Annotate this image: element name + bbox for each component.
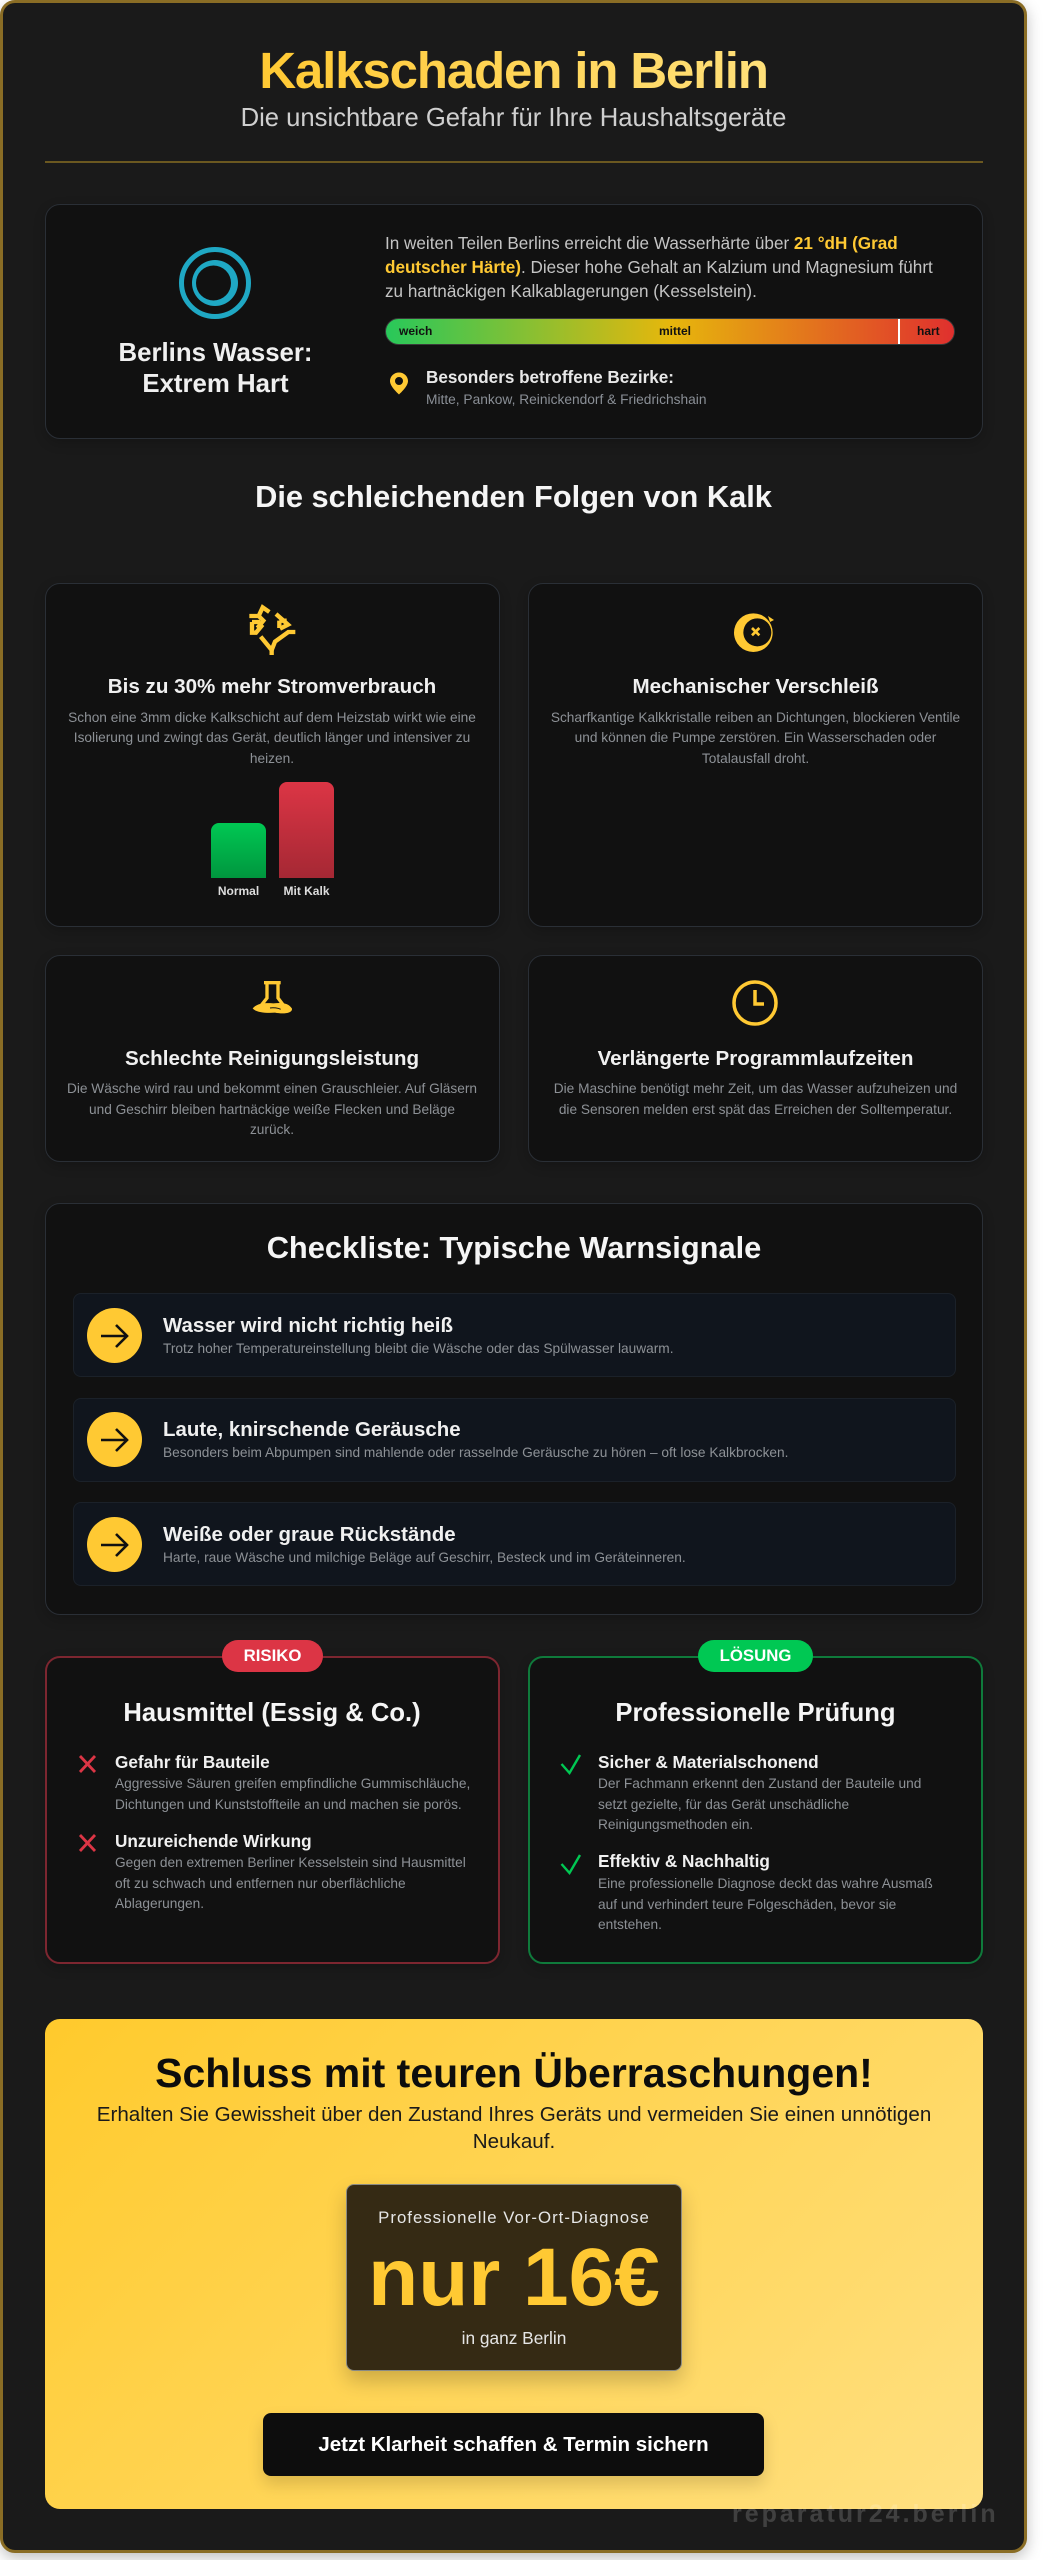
text: water hardness: zu hartnäckigen Kalkablagerungen (Kesselstein).: [385, 282, 757, 301]
label: mittel: mittel: [659, 324, 691, 338]
price: nur 16€: [368, 2232, 660, 2323]
heading: consequences: Die schleichenden Folgen von Kalk: [255, 479, 772, 514]
text: und Geschirr bleiben hartnäckige weiße Flecken und Beläge: [89, 1102, 455, 1117]
bar: mit Kalk: [279, 782, 334, 878]
text: [68, 710, 476, 766]
heading: Verlängerte Programmlaufzeiten: [598, 1047, 913, 1070]
text: Totalausfall droht.: [702, 751, 809, 766]
icon: x: [79, 1834, 96, 1852]
solution item 2 text: [598, 1876, 933, 1932]
panel: Stromverbrauch: [44, 583, 500, 927]
solution item 2 title: Effektiv & Nachhaltig: [598, 1851, 770, 1871]
subtitle: Die unsichtbare Gefahr für Ihre Haushaltsgeräte: [241, 104, 786, 132]
heading: Berlins Wasser: Berlins Wasser:: [118, 339, 313, 367]
text: [67, 1081, 477, 1137]
marker: [898, 319, 900, 344]
panel: risk: [44, 1656, 500, 1964]
solution item 2 text: auf und verhindert teure Folgeschäden, bevor sie: [598, 1897, 896, 1912]
text: water hardness: In weiten Teilen Berlins erreicht die Wasserhärte über 21 °dH (Grad: [385, 234, 898, 253]
price box: [346, 2184, 682, 2371]
price note: in ganz Berlin: [462, 2328, 566, 2348]
checklist item 1: [73, 1293, 956, 1377]
icon: flask with residue: [252, 981, 292, 1014]
text: Schon eine 3mm dicke Kalkschicht auf dem Heizstab wirkt wie eine: [68, 710, 476, 724]
badge: Loesung: [698, 1640, 813, 1672]
heading: Pruefung: Professionelle Prüfung: [615, 1699, 896, 1727]
badge: Risiko: RISIKO: [244, 1646, 301, 1665]
checklist item 3: [73, 1502, 956, 1586]
label: hart: hart: [917, 324, 940, 338]
icon: worn gear crescent: [734, 613, 774, 652]
risk item 2 text: Gegen den extremen Berliner Kesselstein sind Hausmittel: [115, 1855, 466, 1870]
text: affected districts: Besonders betroffene Bezirke:: [426, 368, 674, 387]
risk item 2 text: Ablagerungen.: [115, 1896, 204, 1911]
button: cta: [263, 2413, 764, 2476]
icon: arrow: [87, 1412, 142, 1467]
solution item 1 text: Der Fachmann erkennt den Zustand der Bauteile und: [598, 1776, 921, 1791]
text: [554, 1081, 957, 1117]
panel: Programmlaufzeiten: [528, 955, 983, 1162]
solution item 1 text: setzt gezielte, für das Gerät unschädliche: [598, 1797, 849, 1812]
icon: map pin: [390, 372, 408, 394]
heading: Berlins Wasser: Extrem Hart: [142, 370, 289, 398]
title: Kalkschaden in Berlin: [259, 42, 768, 99]
panel: checklist: [44, 1203, 983, 1615]
badge: Loesung: LÖSUNG: [720, 1646, 791, 1665]
solution item 1 text: [598, 1776, 921, 1832]
text: water hardness: deutscher Härte). Dieser hohe Gehalt an Kalzium und Magnesium führt: [385, 258, 933, 277]
label: normal: Normal: [218, 884, 259, 898]
item title: Wasser wird nicht richtig heiß: [163, 1314, 453, 1337]
item text: Besonders beim Abpumpen sind mahlende oder rasselnde Geräusche zu hören – oft lose Kalkbrocken.: [163, 1445, 788, 1460]
text: zurück.: [250, 1122, 294, 1137]
text: Die Maschine benötigt mehr Zeit, um das Wasser aufzuheizen und: [554, 1081, 957, 1096]
risk item 1 title: Gefahr für Bauteile: [115, 1752, 270, 1772]
heading: checklist: Checkliste: Typische Warnsignale: [267, 1230, 761, 1265]
risk item 1 text: Dichtungen und Kunststoffteile an und machen sie porös.: [115, 1797, 462, 1812]
button: cta: Jetzt Klarheit schaffen & Termin sichern: [318, 2433, 709, 2456]
text: cta: [97, 2103, 931, 2153]
chart: hardness scale bar: [385, 318, 955, 345]
solution item 2 text: Eine professionelle Diagnose deckt das wahre Ausmaß: [598, 1876, 933, 1891]
icon: arrow: [87, 1308, 142, 1363]
checklist item 2: [73, 1398, 956, 1482]
icon: check: [560, 1854, 581, 1875]
icon: plug with lightning: [249, 604, 296, 655]
item title: Weiße oder graue Rückstände: [163, 1523, 456, 1546]
bar: normal: [211, 823, 266, 878]
panel: Reinigungsleistung: [44, 955, 500, 1162]
solution item 1 text: Reinigungsmethoden ein.: [598, 1817, 753, 1832]
risk item 2 text: oft zu schwach und entfernen nur oberflächliche: [115, 1876, 406, 1891]
item text: Harte, raue Wäsche und milchige Beläge auf Geschirr, Besteck und im Geräteinneren.: [163, 1550, 686, 1565]
icon: water rings: [179, 247, 251, 319]
text: cta: Erhalten Sie Gewissheit über den Zustand Ihres Geräts und vermeiden Sie einen unnötigen: [97, 2103, 931, 2126]
item title: Laute, knirschende Geräusche: [163, 1418, 461, 1441]
solution item 2 text: entstehen.: [598, 1917, 662, 1932]
icon: x: [79, 1755, 96, 1773]
text: Scharfkantige Kalkkristalle reiben an Dichtungen, blockieren Ventile: [551, 710, 960, 724]
heading: Berlins Wasser: [118, 339, 313, 398]
heading: Schlechte Reinigungsleistung: [125, 1047, 419, 1070]
solution item 1 title: Sicher & Materialschonend: [598, 1752, 819, 1772]
item text: Trotz hoher Temperatureinstellung bleibt die Wäsche oder das Spülwasser lauwarm.: [163, 1341, 674, 1356]
heading: Bis zu 30% mehr Stromverbrauch: [108, 674, 436, 698]
badge: Risiko: [222, 1640, 323, 1672]
heading: Hausmittel: Hausmittel (Essig & Co.): [123, 1699, 421, 1727]
panel: call to action: [44, 2019, 983, 2509]
price label: Professionelle Vor-Ort-Diagnose: [378, 2208, 650, 2227]
text: die Sensoren melden erst spät das Erreichen der Solltemperatur.: [559, 1102, 952, 1117]
panel: solution: [528, 1656, 983, 1964]
text: Isolierung und zwingt das Gerät, deutlich länger und intensiver zu: [74, 730, 470, 745]
label: mit Kalk: Mit Kalk: [283, 884, 330, 898]
risk item 1 text: Aggressive Säuren greifen empfindliche Gummischläuche,: [115, 1776, 470, 1791]
label: weich: weich: [399, 324, 432, 338]
text: heizen.: [250, 751, 294, 766]
text: [551, 710, 960, 766]
icon: clock: [732, 980, 778, 1026]
text: cta: Neukauf.: [473, 2130, 555, 2153]
risk item 1 text: [115, 1776, 470, 1812]
text: und können die Pumpe zerstören. Ein Wasserschaden oder: [575, 730, 936, 745]
watermark: reparatur24.berlin: [732, 2500, 999, 2528]
risk item 2 text: [115, 1855, 466, 1911]
panel: Verschleiss: [528, 583, 983, 927]
heading: Mechanischer Verschleiß: [632, 674, 879, 698]
heading: cta: Schluss mit teuren Überraschungen!: [155, 2050, 873, 2096]
icon: arrow: [87, 1517, 142, 1572]
icon: check: [560, 1754, 581, 1775]
risk item 2 title: Unzureichende Wirkung: [115, 1831, 312, 1851]
bar chart: power consumption: [211, 782, 334, 898]
text: water hardness: [385, 234, 933, 301]
text: district list: Mitte, Pankow, Reinickendorf & Friedrichshain: [426, 392, 706, 407]
panel: Berlin water hardness: [44, 204, 983, 439]
text: Die Wäsche wird rau und bekommt einen Grauschleier. Auf Gläsern: [67, 1081, 477, 1096]
